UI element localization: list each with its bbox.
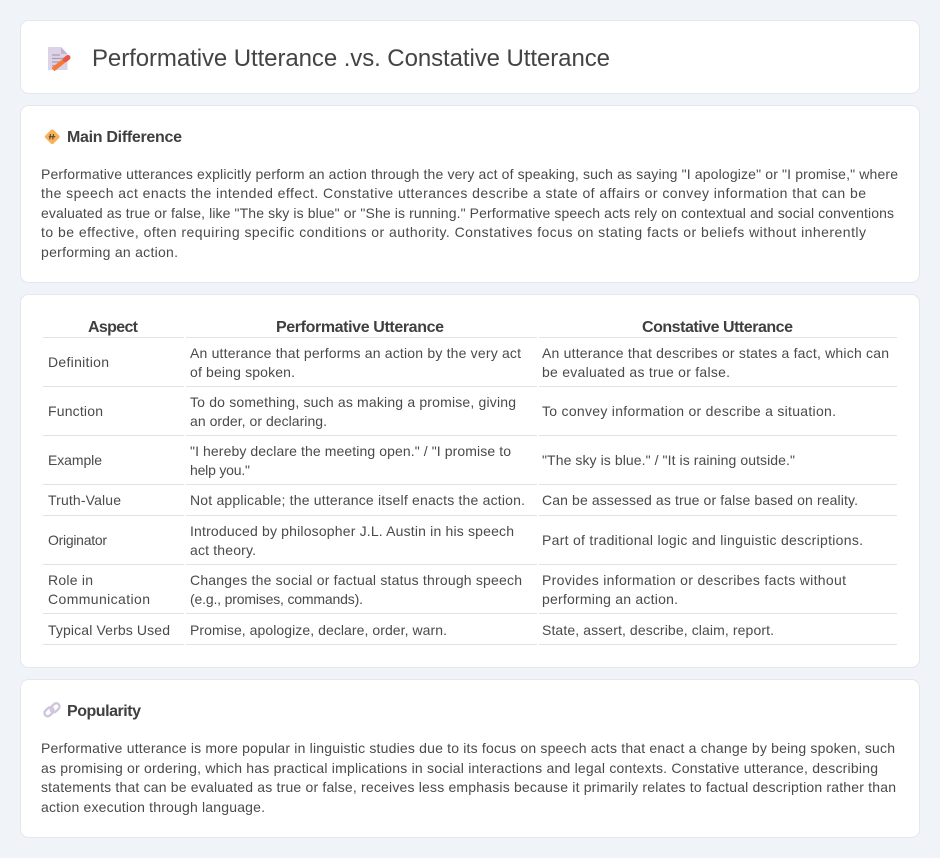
row: function: an order, or declaring. [190,413,327,429]
row: example: help you." [190,462,250,478]
heading: popularity: Popularity [67,703,141,720]
icon: chain link [43,702,61,718]
text block: main difference: evaluated as true or false, like "The sky is blue" or "She is running." Performative speech acts rely on contextual and social conventions [41,205,894,221]
row: typical verbs used: Promise, apologize, declare, order, warn. [190,622,447,638]
row: truth-value [48,492,858,508]
text block: main difference: to be effective, often requiring specific conditions or authority. Constatives focus on stating facts or beliefs without inherently [41,224,866,240]
text block: popularity: Performative utterance is more popular in linguistic studies due to its focus on speech acts that enact a change by being spoken, such [41,740,895,756]
row: example: "I hereby declare the meeting open." / "I promise to [190,443,511,459]
row: originator [48,523,863,558]
row: role in communication: Role in [48,572,93,588]
table header: Aspect [88,319,139,336]
row: role in communication [48,572,846,607]
row: role in communication: Communication [48,591,150,607]
row: originator: Originator [48,532,107,548]
heading: main difference: Main Difference [67,129,182,146]
row: typical verbs used: Typical Verbs Used [48,622,170,638]
table header [88,319,793,336]
row: example: Example [48,452,102,468]
row: definition: An utterance that describes or states a fact, which can [542,345,889,361]
panel: main difference [20,106,920,282]
row: function: To convey information or describe a situation. [542,403,836,419]
text block: popularity: statements that can be evaluated as true or false, receives less emphasis because it primarily relates to factual description rather than [41,779,896,795]
row: function [48,394,836,429]
row: typical verbs used [48,622,774,638]
row: function: Function [48,403,103,419]
row: definition: Definition [48,354,109,370]
row: role in communication: performing an action. [542,591,678,607]
icon: document with pencil [48,47,68,70]
panel: popularity [20,680,920,838]
row: function: To do something, such as making a promise, giving [190,394,516,410]
text block: main difference: Performative utterances explicitly perform an action through the very act of speaking, such as saying "I apologize" or "I promise," where [41,166,898,182]
row: role in communication: Changes the social or factual status through speech [190,572,522,588]
icon: road sign diamond [44,129,60,145]
row: example [48,443,795,478]
title: Performative Utterance .vs. Constative Utterance [92,45,610,72]
panel: comparison table [20,294,920,668]
text block: main difference: performing an action. [41,244,178,260]
row: definition: be evaluated as true or false. [542,364,730,380]
panel: header [20,20,920,94]
row: role in communication: (e.g., promises, commands). [190,591,363,607]
row: definition: of being spoken. [190,364,295,380]
row: originator: act theory. [190,542,256,558]
row: definition [48,345,889,380]
row: truth-value: Not applicable; the utterance itself enacts the action. [190,492,525,508]
row: role in communication: Provides information or describes facts without [542,572,846,588]
row: truth-value: Can be assessed as true or false based on reality. [542,492,858,508]
row: originator: Introduced by philosopher J.L. Austin in his speech [190,523,514,539]
row: truth-value: Truth-Value [48,492,121,508]
text block: popularity [41,740,896,815]
row: originator: Part of traditional logic and linguistic descriptions. [542,532,863,548]
row: typical verbs used: State, assert, describe, claim, report. [542,622,774,638]
text block: main difference [41,166,898,260]
text block: main difference: the speech act enacts the intended effect. Constative utterances describe a state of affairs or convey information that can be [41,185,866,201]
table header: Constative Utterance [642,319,793,336]
text block: popularity: action execution through language. [41,799,265,815]
table header: Performative Utterance [276,319,444,336]
row: example: "The sky is blue." / "It is raining outside." [542,452,795,468]
text block: popularity: as promising or ordering, which has practical implications in social interactions and legal contexts. Constative utterance, describing [41,760,878,776]
row: definition: An utterance that performs an action by the very act [190,345,521,361]
